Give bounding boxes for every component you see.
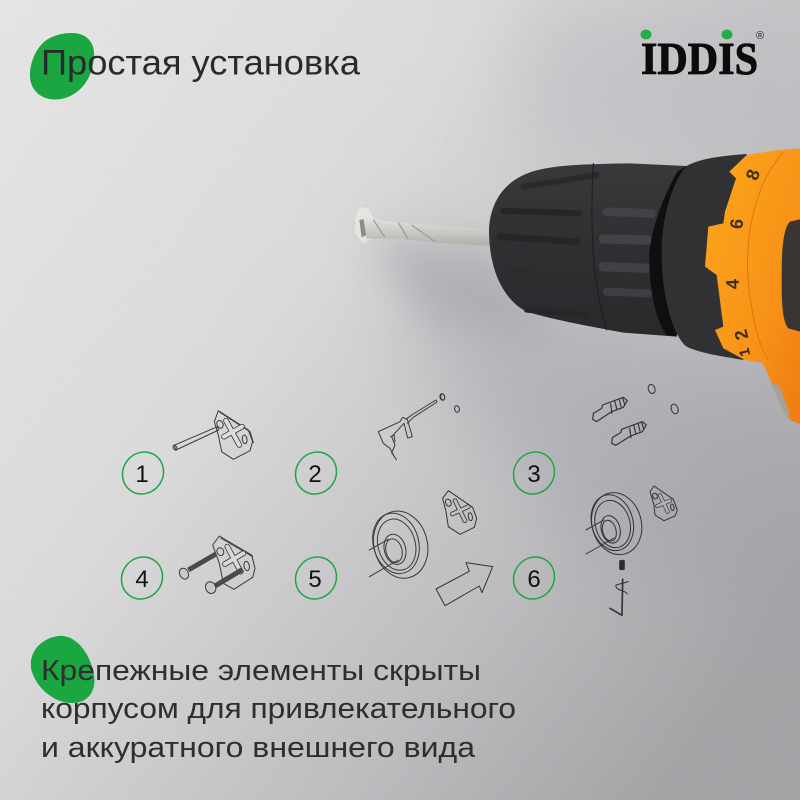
hole shadow (359, 218, 370, 237)
illustration 1: bracket and pin (172, 411, 253, 459)
drill hole in wall (355, 207, 375, 243)
mounting arrow (436, 563, 493, 606)
logo wordmark: IDDIS (641, 34, 758, 84)
step 2 badge (287, 444, 345, 502)
step 1 badge (114, 444, 172, 502)
illustration 2: drill diagram (378, 394, 445, 460)
line 3: и аккуратного внешнего вида (41, 732, 476, 764)
dark grip inset (782, 219, 800, 332)
step 4 badge (113, 549, 171, 607)
bit flute lines (373, 220, 435, 242)
set screw (620, 560, 624, 570)
speed numbers on dial (722, 167, 764, 358)
logo dot left (640, 30, 652, 40)
title: Простая установка (41, 44, 361, 82)
step 4 badge: 4 (135, 566, 149, 593)
speed numbers on dial: 2 (731, 328, 752, 342)
illustration 5: round holder on rod (366, 505, 435, 584)
chuck grooves (500, 163, 652, 330)
ribbed collar (662, 154, 747, 360)
hex key (610, 579, 628, 615)
bracket for step 5 (443, 491, 477, 534)
step 6 badge: 6 (527, 566, 541, 593)
logo: IDDIS (640, 30, 764, 84)
bracket upper right (650, 486, 677, 521)
upper wall plug (593, 397, 627, 422)
step 5 badge (287, 549, 345, 607)
body seam (747, 153, 783, 360)
line 2: корпусом для привлекательного (41, 693, 516, 725)
step 3 badge (505, 444, 563, 502)
step 2 badge: 2 (308, 461, 322, 488)
chuck dark gap (649, 166, 687, 337)
round holder on rod (585, 487, 649, 560)
step 5 badge: 5 (308, 566, 322, 593)
orange body (705, 148, 800, 424)
illustration 4: bracket with screws (178, 536, 255, 595)
green blob behind title (30, 33, 94, 99)
chuck (489, 163, 687, 337)
description text (41, 655, 516, 764)
drill bit (363, 218, 489, 246)
grey switch strip (771, 383, 790, 417)
line 1: Крепежные элементы скрыты (41, 655, 481, 687)
wall plug rings (439, 383, 680, 415)
step 3 badge: 3 (527, 461, 541, 488)
line drawings left and centre (172, 394, 445, 595)
speed numbers on dial: 6 (726, 217, 747, 230)
speed numbers on dial: 8 (742, 167, 764, 183)
lower wall plug (612, 422, 646, 445)
speed numbers on dial: 1 (737, 346, 754, 358)
registered mark: ® (756, 30, 764, 42)
line drawings right (436, 383, 680, 615)
drill (355, 148, 800, 424)
speed numbers on dial: 4 (722, 279, 743, 290)
green blob behind description (31, 636, 94, 703)
step 1 badge: 1 (135, 461, 149, 488)
step 6 badge (505, 549, 563, 607)
logo dot right (722, 30, 732, 40)
